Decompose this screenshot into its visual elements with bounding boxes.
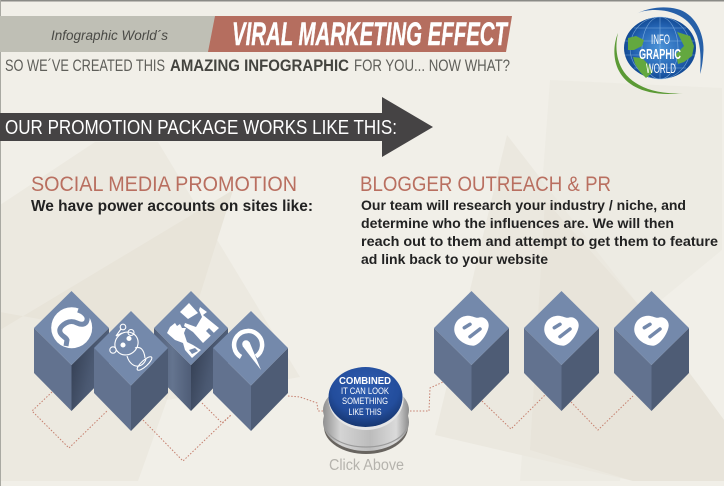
dotted connector lines: [32, 382, 633, 461]
subtitle: AMAZING INFOGRAPHIC: [170, 57, 349, 75]
cube: reddit: [94, 311, 168, 431]
button label: SOMETHING: [342, 396, 388, 406]
cube: blogger 3: [614, 291, 689, 411]
cube: pinterest: [213, 311, 288, 431]
blogger outreach description: determine who the influences are. We will then: [361, 216, 674, 231]
cube: blogger 2: [524, 291, 599, 411]
icon: blogger: [634, 316, 669, 346]
header band: [0, 16, 512, 52]
blogger outreach description: reach out to them and attempt to get them to feature: [361, 234, 719, 249]
button: combined: [323, 367, 409, 454]
subtitle: [5, 57, 510, 75]
cube: blogger 1: [434, 291, 509, 411]
arrow banner text: OUR PROMOTION PACKAGE WORKS LIKE THIS:: [5, 116, 397, 139]
button label: [339, 375, 391, 417]
click above caption: Click Above: [329, 457, 404, 474]
title: VIRAL MARKETING EFFECT: [232, 16, 509, 52]
blogger outreach description: [361, 198, 719, 267]
social media description: We have power accounts on sites like:: [31, 198, 313, 215]
logo: Info Graphic World globe: GRAPHIC: [639, 46, 681, 63]
icon: blogger: [454, 316, 489, 346]
logo: Info Graphic World globe: WORLD: [646, 61, 676, 76]
icon: stumbleupon: [51, 307, 92, 348]
icon: blogger: [544, 316, 579, 346]
button label: LIKE THIS: [348, 407, 382, 417]
blogger outreach description: ad link back to your website: [361, 252, 548, 267]
logo: Info Graphic World globe: INFO: [651, 32, 670, 47]
button label: COMBINED: [339, 375, 391, 387]
heading: social media promotion: SOCIAL MEDIA PROMOTION: [31, 173, 297, 196]
panel: social media promotion text: [31, 173, 313, 215]
subtitle: SO WE´VE CREATED THIS: [5, 57, 165, 75]
blogger outreach description: Our team will research your industry / niche, and: [361, 198, 686, 213]
heading: blogger outreach: BLOGGER OUTREACH & PR: [360, 173, 611, 196]
icon: reddit alien: [110, 324, 154, 372]
panel: blogger outreach text: [360, 173, 719, 267]
cube: delicious: [154, 291, 228, 411]
header kicker: Infographic World´s: [51, 28, 168, 43]
icon: pinterest: [234, 331, 262, 370]
arrow banner: [0, 97, 433, 157]
subtitle: FOR YOU... NOW WHAT?: [354, 57, 510, 75]
button label: IT CAN LOOK: [341, 386, 389, 396]
logo: Info Graphic World globe: [614, 7, 704, 94]
cube: stumbleupon: [34, 291, 109, 411]
icon: network blocks: [167, 303, 219, 358]
